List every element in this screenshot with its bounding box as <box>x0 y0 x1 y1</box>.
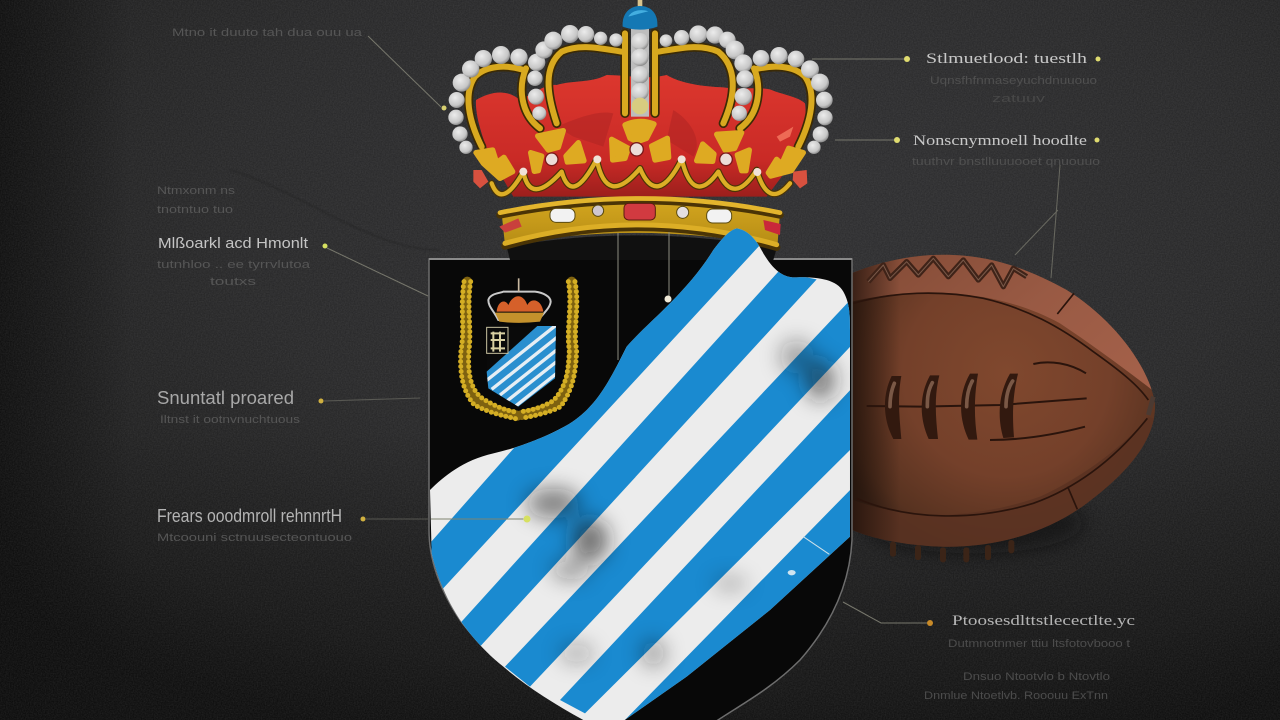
callout: left heading two: tutnhloo .. ee tyrrvlutoa <box>157 259 311 271</box>
callout: left heading three: Iltnst it ootnvnuchtuous <box>160 414 301 426</box>
central pearl column <box>631 28 649 117</box>
left shadow near shield <box>852 260 895 541</box>
callout: lower right note: Dnmlue Ntoetlvb. Rooouu ExTnn <box>924 690 1108 702</box>
icon: football <box>852 254 1156 562</box>
crown band <box>499 198 781 247</box>
blue stripes <box>428 220 853 720</box>
ball body <box>852 254 1155 547</box>
thin guide lines under flag <box>618 232 669 360</box>
emblem: small crest with laurel <box>461 278 577 419</box>
pearls <box>448 25 833 154</box>
panel seams <box>853 293 1148 516</box>
golden arches <box>468 33 812 147</box>
scalloped gold chain <box>492 159 790 194</box>
small crown <box>488 292 551 320</box>
callout: right heading one: Stlmuetlood: tuestlh <box>926 51 1088 67</box>
callout: lower right note: Ptoosesdlttstlecectlte.yc <box>952 613 1135 629</box>
callout: right heading two: Nonscnymnoell hoodlte <box>913 133 1087 149</box>
callout: top left note: Mtno it duuto tah dua ouu ua <box>172 27 363 39</box>
laurel wreath <box>461 282 577 419</box>
callout: left heading four: Frears ooodmroll rehnnrtH <box>157 506 342 526</box>
callout: left heading two: toutxs <box>210 276 257 288</box>
fleuron pearls <box>545 143 732 166</box>
callout: left heading two <box>157 235 428 296</box>
callout: lower right note: Dutmnotnmer ttiu ltsfotovbooo t <box>948 638 1130 650</box>
fabric shadows <box>527 340 835 667</box>
callout: top left note <box>172 27 446 110</box>
callout: left heading three: Snuntatl proared <box>157 388 294 408</box>
callout: left heading two: Mlßoarkl acd Hmonlt <box>158 235 309 252</box>
callout: right heading one: Uqnsfhfnmaseyuchdnuuouo <box>930 75 1097 87</box>
callout: upper left caption: tnotntuo tuo <box>157 204 233 216</box>
marker dot on flag edge <box>664 296 672 302</box>
callout: upper left caption: Ntmxonm ns <box>157 185 236 197</box>
callout: lower right note <box>843 602 1135 702</box>
blue orb <box>623 0 657 30</box>
flag with blue and white stripes <box>420 220 860 720</box>
red side gems <box>473 170 807 188</box>
icon: royal crown <box>448 0 833 260</box>
main lacing <box>885 374 1018 440</box>
panel: crest shield <box>429 259 852 720</box>
velvet cushion <box>476 75 806 197</box>
callout: right heading two: tuuthvr bnstlluuuooet qnuouuo <box>912 156 1100 168</box>
callout: left heading four: Mtcoouni sctnuusecteontuouo <box>157 532 352 544</box>
upper worn panel <box>852 254 1152 390</box>
callout line across flag <box>431 518 524 520</box>
small shield <box>486 326 556 407</box>
dark underside of crown <box>507 235 777 260</box>
callout: left heading three <box>157 388 420 426</box>
bottom lacing stubs <box>890 540 1014 562</box>
callout: lower right note: Dnsuo Ntootvlo b Ntovtlo <box>963 671 1110 683</box>
gold fleurons <box>476 121 803 178</box>
top stitching <box>868 258 1027 287</box>
callout: upper left caption <box>157 185 236 216</box>
callout: left heading four <box>157 506 530 544</box>
callout: right heading one <box>812 51 1100 105</box>
callout: right heading two <box>835 133 1100 278</box>
callout: right heading one: zatuuv <box>992 93 1046 105</box>
lower dark panel <box>853 421 1154 547</box>
